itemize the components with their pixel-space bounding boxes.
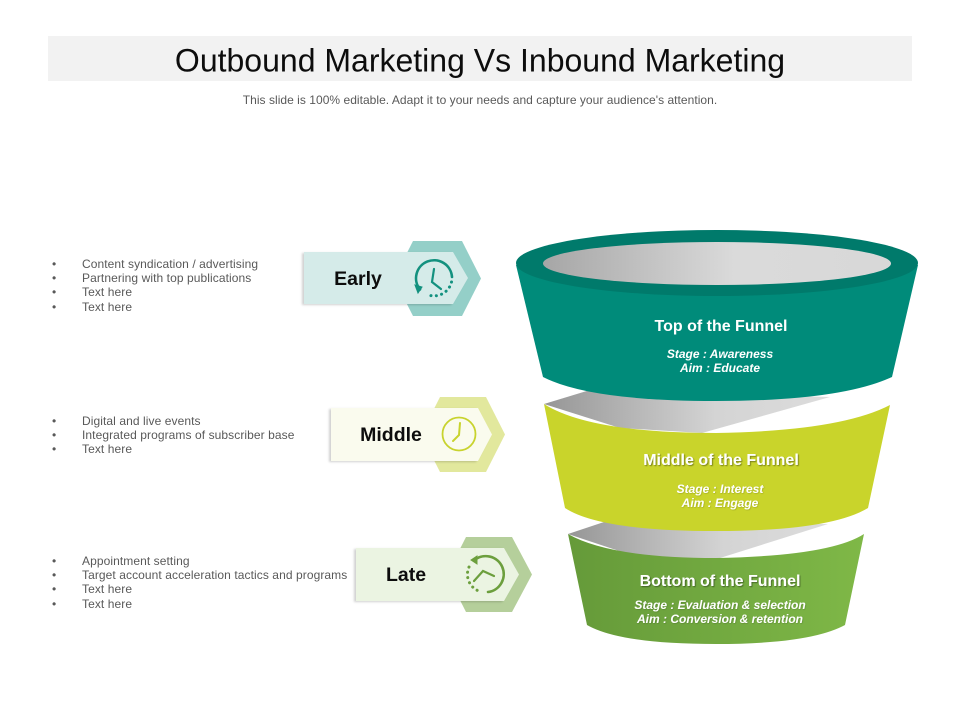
label arrow: late — [356, 537, 532, 612]
text block: early bullets: Partnering with top publications — [82, 271, 251, 285]
funnel: bottom stage: Stage : Evaluation & selection — [634, 598, 806, 612]
icon: clock middle — [442, 418, 476, 450]
text block: late bullets: Text here — [82, 582, 132, 596]
title bar — [48, 36, 912, 81]
funnel: middle stage: Aim : Engage — [681, 496, 759, 510]
text block: middle bullets: • — [52, 442, 56, 456]
text block: middle bullets: Text here — [82, 442, 132, 456]
text block: late bullets: Appointment setting — [82, 554, 190, 568]
subtitle: This slide is 100% editable. Adapt it to your needs and capture your audience's attention. — [243, 93, 717, 107]
inner shadow wedge — [544, 390, 830, 433]
funnel: middle stage: Stage : Interest — [677, 482, 764, 496]
text block: late bullets: • — [52, 554, 56, 568]
text block: late bullets: Target account acceleration tactics and programs — [82, 568, 347, 582]
funnel: top stage — [516, 230, 918, 401]
text block: late bullets: • — [52, 582, 56, 596]
label arrow: early — [304, 241, 481, 316]
text block: late bullets — [52, 554, 347, 611]
funnel: middle stage: Middle of the Funnel — [643, 452, 799, 469]
text block: early bullets: Text here — [82, 300, 132, 314]
text block: early bullets: • — [52, 271, 56, 285]
icon: clock late — [467, 556, 504, 592]
label arrow: middle: Middle — [360, 424, 422, 446]
text block: middle bullets: Digital and live events — [82, 414, 201, 428]
title bar: Outbound Marketing Vs Inbound Marketing — [175, 42, 785, 78]
funnel rim — [516, 230, 918, 296]
text block: late bullets: • — [52, 568, 56, 582]
label arrow: middle — [331, 397, 505, 472]
text block: late bullets: • — [52, 597, 56, 611]
text block: early bullets — [52, 257, 258, 314]
funnel: bottom stage: Bottom of the Funnel — [640, 573, 800, 590]
text block: early bullets: Text here — [82, 285, 132, 299]
inner shadow wedge — [568, 520, 828, 558]
text block: middle bullets: • — [52, 414, 56, 428]
text block: late bullets: Text here — [82, 597, 132, 611]
label arrow: late: Late — [386, 564, 426, 586]
funnel: top stage: Aim : Educate — [679, 361, 760, 375]
text block: early bullets: • — [52, 300, 56, 314]
icon: clock early — [415, 260, 452, 296]
text block: middle bullets: • — [52, 428, 56, 442]
funnel: top stage: Top of the Funnel — [654, 318, 788, 335]
funnel: middle stage — [544, 390, 890, 531]
text block: early bullets: Content syndication / advertising — [82, 257, 258, 271]
label arrow: early: Early — [334, 268, 382, 290]
funnel: top stage: Stage : Awareness — [667, 347, 773, 361]
funnel opening — [543, 242, 891, 285]
text block: middle bullets: Integrated programs of subscriber base — [82, 428, 295, 442]
text block: early bullets: • — [52, 285, 56, 299]
text block: middle bullets — [52, 414, 295, 456]
funnel: bottom stage — [568, 520, 864, 644]
funnel: bottom stage: Aim : Conversion & retention — [636, 612, 803, 626]
text block: early bullets: • — [52, 257, 56, 271]
